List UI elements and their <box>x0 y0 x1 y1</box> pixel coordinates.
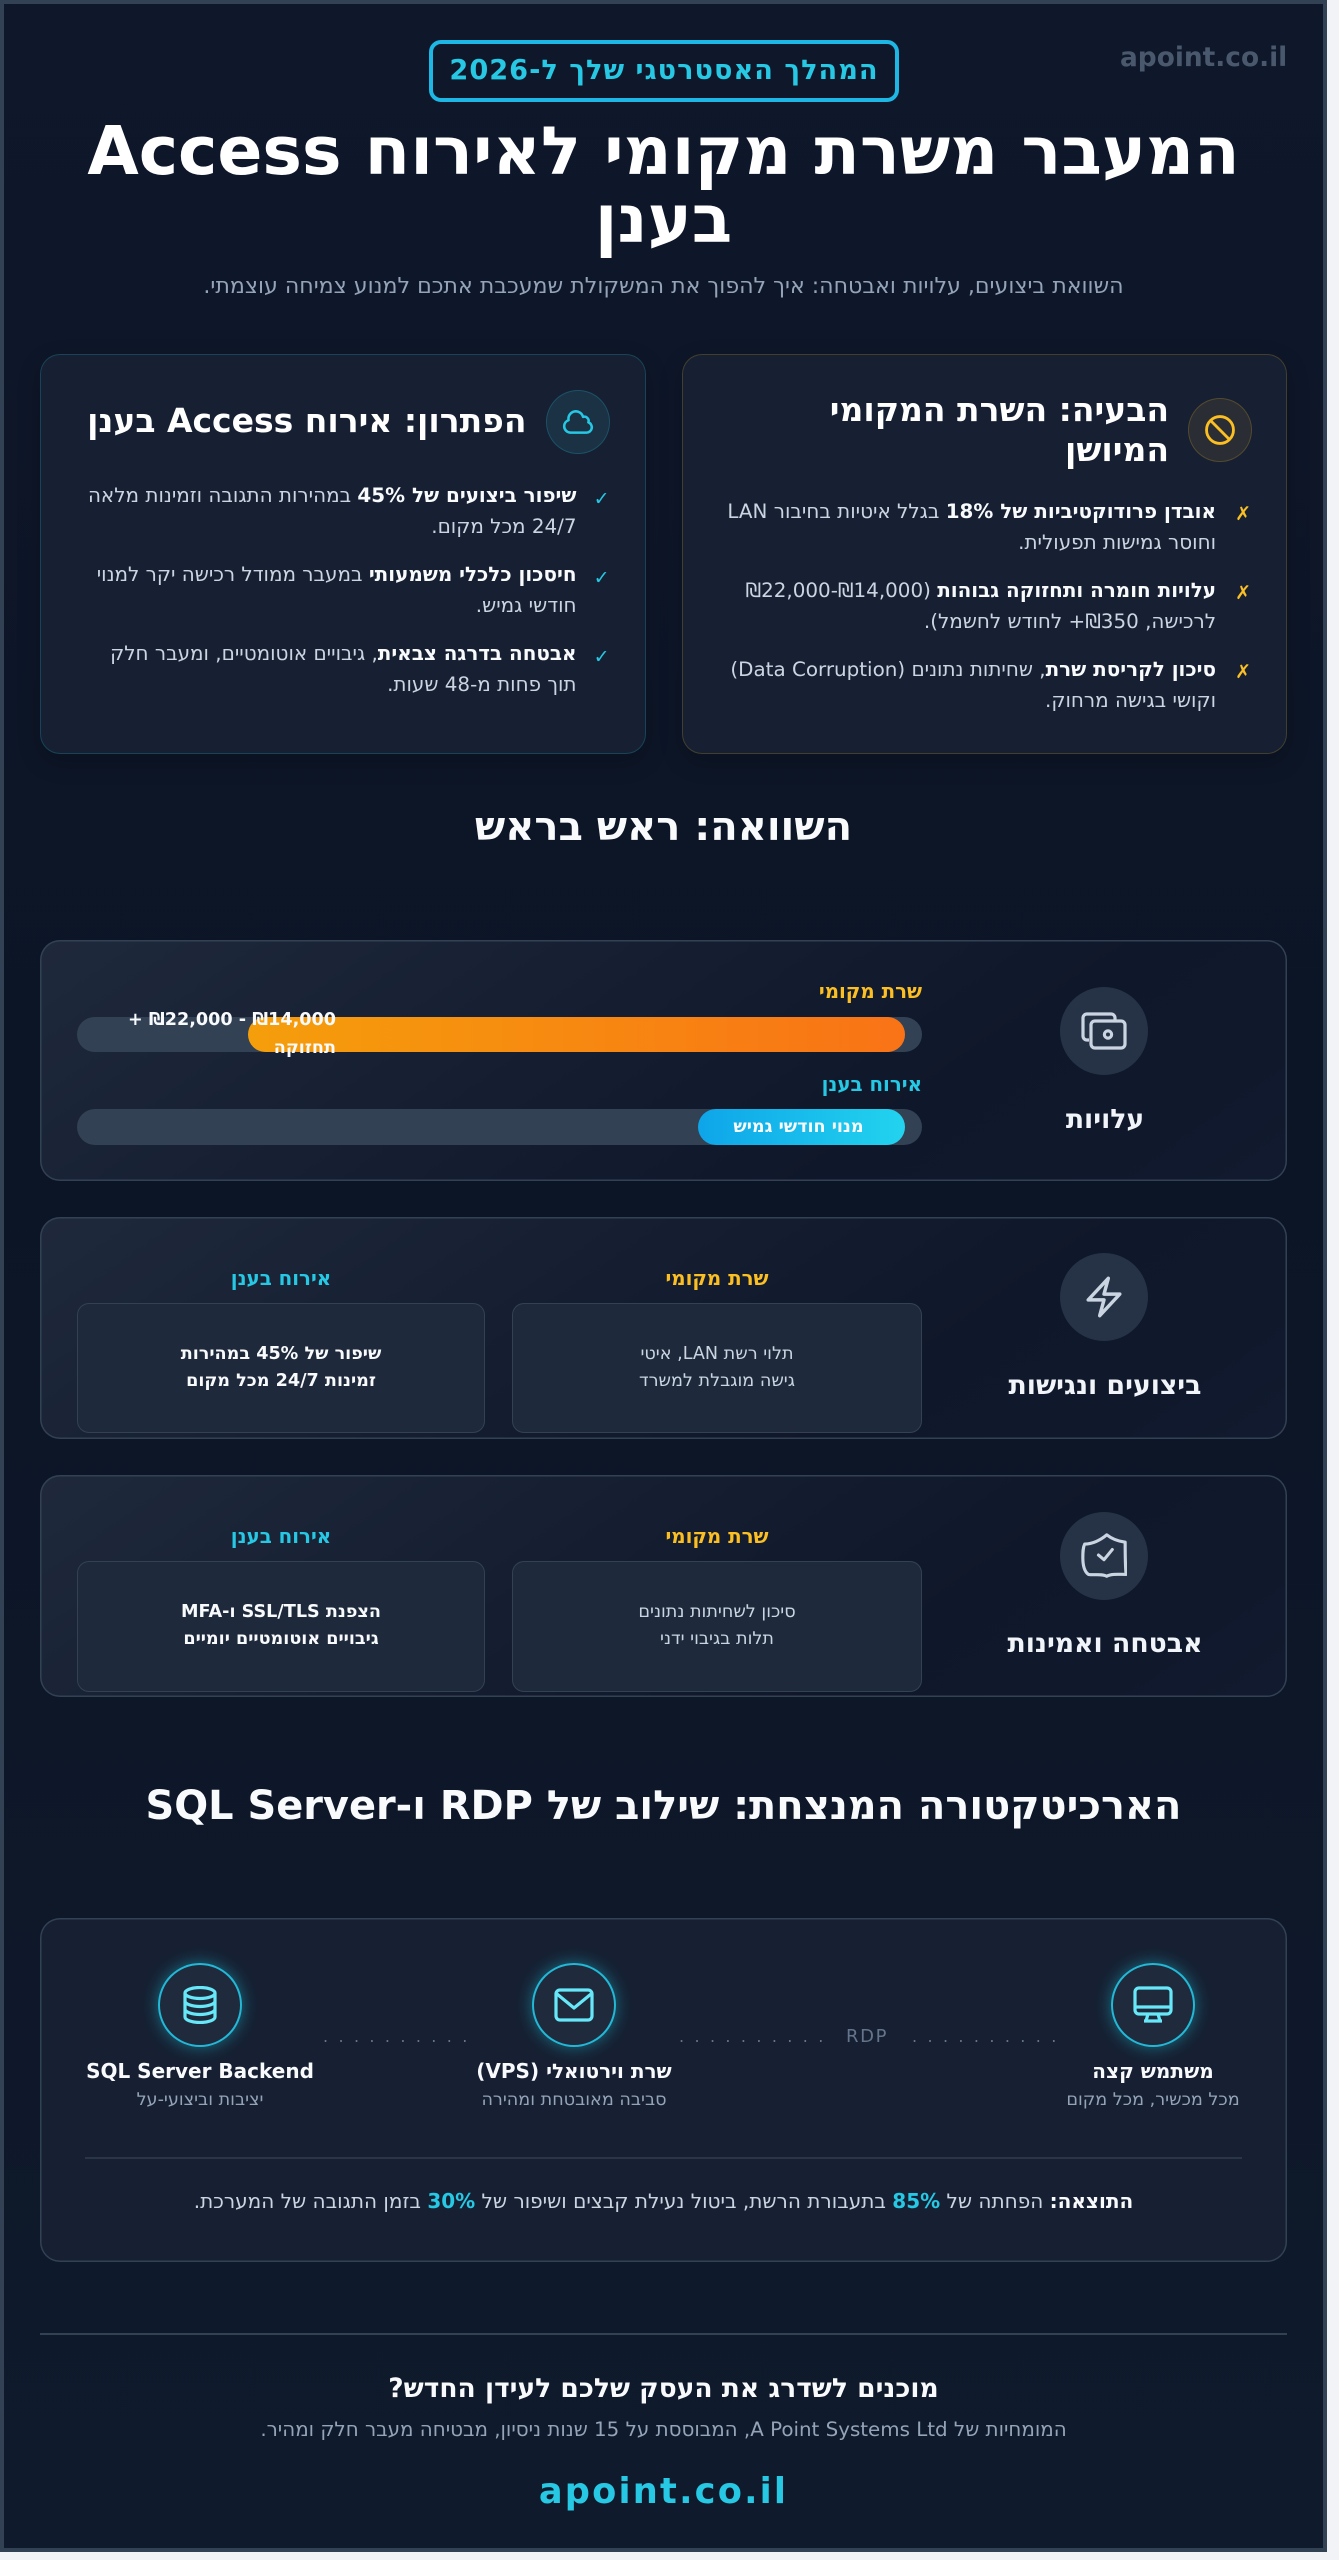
solution item 2: חיסכון כלכלי משמעותי במעבר ממודל רכישה יקר למנוי <box>97 563 576 586</box>
solution item 3: תוך פחות מ-48 שעות. <box>387 673 576 696</box>
problem item 1: וחוסר גמישות תפעולית. <box>1018 531 1216 554</box>
node: end user <box>1111 1963 1195 2047</box>
call to action heading: מוכנים לשדרג את העסק שלכם לעידן החדש? <box>388 2373 939 2404</box>
node: virtual server <box>532 1963 616 2047</box>
problem item 3: סיכון לקריסת שרת, שחיתות נתונים (Data Corruption) <box>730 658 1216 681</box>
footer divider <box>40 2333 1287 2335</box>
box: cloud security <box>77 1561 485 1692</box>
connector: dots left of RDP: . . . . . . . . . . <box>679 2027 826 2046</box>
problem item 3 <box>730 658 1216 712</box>
box: local server security <box>512 1561 922 1692</box>
watermark: apoint.co.il: apoint.co.il <box>1120 42 1287 73</box>
box: local server security: סיכון לשחיתות נתונים <box>638 1602 796 1622</box>
panel: the problem <box>682 354 1287 754</box>
connector: dots right of RDP: . . . . . . . . . . <box>912 2027 1059 2046</box>
solution item 1: שיפור ביצועים של 45% במהירות התגובה וזמינות מלאה <box>88 484 576 507</box>
icon: shield check <box>1060 1512 1148 1600</box>
box: local server performance: גישה מוגבלת למשרד <box>639 1371 795 1391</box>
x mark 1: ✗ <box>1235 503 1251 525</box>
subtitle: השוואת ביצועים, עלויות ואבטחה: איך להפוך את המשקולת שמעכבת אתכם למנוע צמיחה עוצמתי. <box>203 273 1124 299</box>
bar text: local cost: ₪14,000 - ₪22,000 + <box>128 1010 336 1030</box>
icon: ban <box>1188 398 1252 462</box>
title: המעבר משרת מקומי לאירוח Access <box>87 112 1240 190</box>
box: cloud performance: זמינות 24/7 מכל מקום <box>186 1371 376 1391</box>
divider <box>85 2157 1242 2159</box>
node description: virtual server: סביבה מאובטחת ומהירה <box>481 2090 667 2110</box>
solution heading: הפתרון: אירוח Access בענן <box>87 401 526 440</box>
heading: architecture: הארכיטקטורה המנצחת: שילוב של RDP ו-SQL Server <box>146 1783 1181 1829</box>
heading: head to head comparison: השוואה: ראש בראש <box>475 804 852 850</box>
node name: SQL backend: SQL Server Backend <box>86 2059 314 2083</box>
feature title: security: אבטחה ואמינות <box>1007 1628 1203 1659</box>
label: local server: שרת מקומי <box>665 1267 769 1290</box>
panel: performance row <box>40 1217 1287 1439</box>
bar: local server track <box>77 1017 922 1052</box>
label: local server: שרת מקומי <box>665 1525 769 1548</box>
box: cloud security: גיבויים אוטומטיים יומיים <box>183 1629 379 1649</box>
box: cloud performance <box>77 1303 485 1433</box>
problem item 3: וקושי בגישה מרחוק. <box>1045 689 1216 712</box>
problem heading: המיושן <box>1065 430 1169 469</box>
node name: end user: משתמש קצה <box>1092 2059 1214 2083</box>
panel: security row <box>40 1475 1287 1697</box>
bar: cloud track <box>77 1109 922 1145</box>
solution item 1 <box>88 484 576 538</box>
call to action text: המומחיות של A Point Systems Ltd, המבוססת על 15 שנות ניסיון, מבטיחה מעבר חלק ומהיר. <box>260 2418 1067 2441</box>
problem item 2: עלויות חומרה ותחזוקה גבוהות (₪14,000-₪22,000 <box>746 579 1216 602</box>
title <box>87 112 1240 258</box>
bar: cloud fill <box>698 1109 905 1145</box>
result text: התוצאה: הפחתה של 85% בתעבורת הרשת, ביטול נעילת קבצים ושיפור של 30% בזמן התגובה של המערכת. <box>194 2189 1133 2213</box>
solution item 2: חודשי גמיש. <box>476 594 576 617</box>
node description: end user: מכל מכשיר, מכל מקום <box>1066 2090 1240 2110</box>
label: cloud hosting: אירוח בענן <box>231 1525 331 1548</box>
bar: cloud fill: מנוי חודשי גמיש <box>733 1117 864 1137</box>
box: local server security: תלות בגיבוי ידני <box>660 1629 774 1649</box>
solution item 2 <box>97 563 576 617</box>
box: cloud security: הצפנת SSL/TLS ו-MFA <box>181 1602 381 1622</box>
label: cloud hosting: אירוח בענן <box>231 1267 331 1290</box>
icon: bolt <box>1060 1253 1148 1341</box>
check mark 1: ✓ <box>594 488 610 510</box>
solution item 1: 24/7 מכל מקום. <box>431 515 576 538</box>
problem item 2 <box>746 579 1216 633</box>
bar text: local cost: תחזוקה <box>274 1038 336 1058</box>
problem item 2: לרכישה, ₪350+ לחודש לחשמל). <box>924 610 1216 633</box>
x mark 3: ✗ <box>1235 661 1251 683</box>
solution item 3 <box>110 642 576 696</box>
badge: strategic move for 2026: המהלך האסטרטגי שלך ל-2026 <box>449 55 879 86</box>
problem heading: הבעיה: השרת המקומי <box>830 390 1169 429</box>
feature title: performance: ביצועים ונגישות <box>1009 1370 1201 1401</box>
connector: dots to SQL backend: . . . . . . . . . . <box>323 2027 470 2046</box>
badge: strategic move for 2026 <box>429 40 899 102</box>
check mark 3: ✓ <box>594 646 610 668</box>
node name: virtual server: שרת וירטואלי (VPS) <box>476 2059 672 2083</box>
bar text: local cost <box>128 1010 336 1058</box>
problem item 1: אובדן פרודוקטיביות של 18% בגלל איטיות בחיבור LAN <box>727 500 1216 523</box>
panel: costs row <box>40 940 1287 1181</box>
icon: banknotes <box>1060 987 1148 1075</box>
node description: SQL backend: יציבות וביצועי-על <box>137 2090 263 2110</box>
box: local server performance <box>512 1303 922 1433</box>
problem heading <box>830 390 1169 469</box>
problem item 1 <box>727 500 1216 554</box>
connector label: RDP: RDP <box>846 2026 888 2047</box>
box: cloud performance: שיפור של 45% במהירות <box>181 1344 381 1364</box>
solution item 3: אבטחה בדרגה צבאית, גיבויים אוטומטיים, ומעבר חלק <box>110 642 576 665</box>
x mark 2: ✗ <box>1235 582 1251 604</box>
icon: cloud <box>546 390 610 454</box>
bar: local server fill <box>248 1017 905 1052</box>
footer link: apoint.co.il <box>539 2471 788 2512</box>
title: בענן <box>595 180 732 258</box>
label: cloud hosting: אירוח בענן <box>822 1073 922 1096</box>
panel: the solution <box>40 354 646 754</box>
feature title: costs: עלויות <box>1066 1104 1144 1135</box>
box: local server performance: תלוי רשת LAN, איטי <box>640 1344 794 1364</box>
label: local server: שרת מקומי <box>819 980 922 1003</box>
node: SQL backend <box>158 1963 242 2047</box>
panel: architecture <box>40 1918 1287 2262</box>
check mark 2: ✓ <box>594 567 610 589</box>
